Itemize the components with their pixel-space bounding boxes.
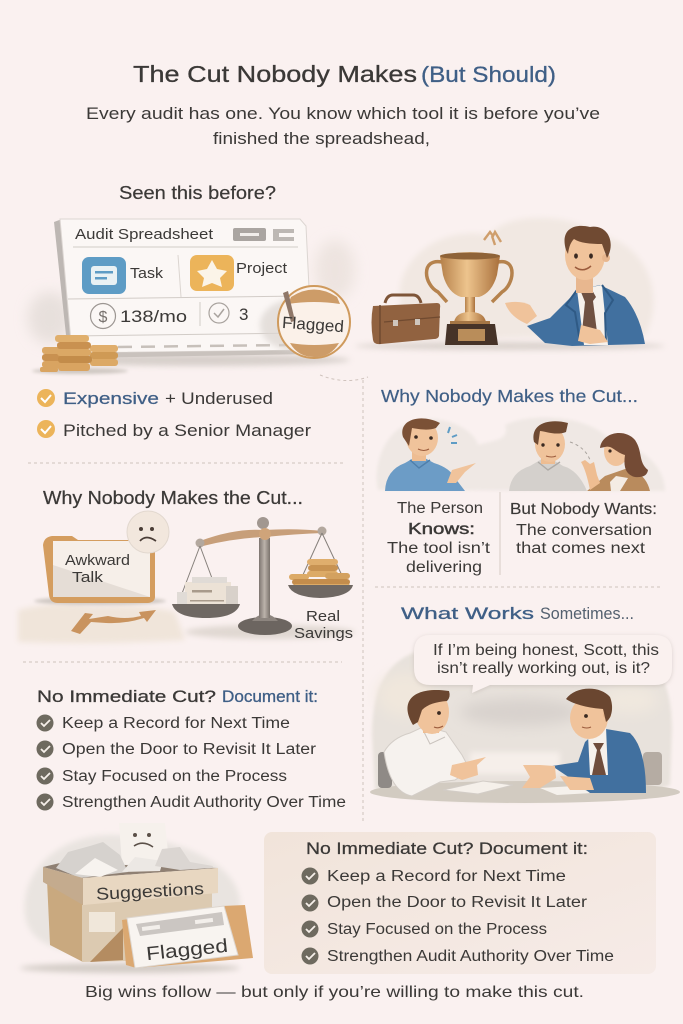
illustration: two conversations <box>377 417 665 491</box>
item 1: Keep a Record for Next Time <box>62 715 290 732</box>
text: the person knows: delivering <box>406 559 482 576</box>
text: but nobody wants: But Nobody Wants: <box>510 501 657 518</box>
heading: Document it: <box>222 688 318 706</box>
label: count: 3 <box>239 305 248 324</box>
heading: No Immediate Cut? <box>37 688 216 706</box>
item: expensive <box>37 389 273 408</box>
label: real savings: Savings <box>294 625 353 642</box>
panel: no immediate cut (box) <box>264 832 656 974</box>
speech bubble: If I’m being honest, Scott, this <box>433 642 659 659</box>
heading: No Immediate Cut? Document it: <box>306 840 588 858</box>
heading: what works sometimes: What Works <box>401 604 534 623</box>
illustration: awkward talk folder <box>18 511 185 643</box>
title: (But Should) <box>421 62 556 87</box>
label: real savings <box>294 608 353 642</box>
label: cost: 138/mo <box>120 307 187 326</box>
subtitle: finished the spreadshead, <box>213 129 430 148</box>
speech bubble <box>414 635 672 693</box>
item 3: Stay Focused on the Process <box>327 921 547 938</box>
icon: dollar: $ <box>99 309 108 326</box>
item: expensive: + Underused <box>165 389 273 408</box>
text: the person knows: Knows: <box>408 521 475 538</box>
crumpled papers <box>56 842 213 878</box>
text: but nobody wants <box>510 501 657 557</box>
person: left man <box>384 690 486 796</box>
curved dashed arrow <box>320 375 368 381</box>
heading: why nobody right: Why Nobody Makes the Cut... <box>381 386 638 406</box>
checklist: expensive and pitched <box>37 389 311 440</box>
heading: what works sometimes <box>401 604 634 623</box>
label: task: Task <box>130 265 164 282</box>
heading: what works sometimes: Sometimes... <box>540 604 634 623</box>
badge: flagged <box>260 286 350 358</box>
checklist: no immediate cut (left) <box>36 688 346 811</box>
flagged folder <box>122 905 253 968</box>
illustration: balance scale <box>172 517 355 642</box>
arrow <box>71 610 156 634</box>
person: right man <box>522 689 646 793</box>
trophy <box>426 232 512 345</box>
badge: flagged: Flagged <box>281 314 345 336</box>
briefcase <box>372 295 440 344</box>
icon: task <box>82 257 126 294</box>
label: awkward talk: Awkward <box>65 553 130 569</box>
item: pitched: Pitched by a Senior Manager <box>63 421 311 440</box>
illustration: audit spreadsheet card <box>28 219 355 366</box>
label: awkward talk: Talk <box>72 570 104 586</box>
icon: project star <box>190 255 234 291</box>
person: woman <box>581 433 650 491</box>
subtitle <box>86 104 600 148</box>
illustration: meeting scene <box>370 648 680 803</box>
item 2: Open the Door to Revisit It Later <box>62 741 316 758</box>
presenter <box>505 226 645 346</box>
item 4: Strengthen Audit Authority Over Time <box>62 794 346 811</box>
sad note <box>119 823 169 865</box>
papers <box>443 781 513 794</box>
label: suggestions: Suggestions <box>96 879 204 904</box>
heading <box>37 688 318 706</box>
card title: Audit Spreadsheet <box>75 226 214 243</box>
text: but nobody wants: The conversation <box>516 522 652 539</box>
illustration: coin stacks <box>32 335 128 374</box>
left pan papers <box>177 577 238 608</box>
illustration: suggestions box <box>20 823 253 973</box>
item 4: Strengthen Audit Authority Over Time <box>327 948 614 965</box>
footer: Big wins follow — but only if you’re willing to make this cut. <box>85 984 584 1001</box>
label: flagged: Flagged <box>145 936 229 965</box>
title: The Cut Nobody Makes <box>133 61 417 87</box>
window buttons <box>233 228 295 241</box>
illustration: trophy, briefcase and presenter <box>355 218 665 350</box>
person: man in blue shirt <box>385 418 476 491</box>
text: the person knows: The Person <box>397 500 483 517</box>
item 3: Stay Focused on the Process <box>62 768 287 785</box>
text: but nobody wants: that comes next <box>516 540 646 557</box>
person: man in grey shirt <box>509 421 587 491</box>
label: real savings: Real <box>306 608 340 625</box>
item: expensive: Expensive <box>63 389 159 408</box>
speech bubble: isn’t really working out, is it? <box>437 660 650 677</box>
crate <box>43 867 218 962</box>
heading: seen this before: Seen this before? <box>119 183 276 203</box>
item 1: Keep a Record for Next Time <box>327 868 566 885</box>
label: project: Project <box>236 260 288 277</box>
crate lid interior <box>43 863 218 878</box>
item 2: Open the Door to Revisit It Later <box>327 894 587 911</box>
heading: why nobody left: Why Nobody Makes the Cut... <box>43 488 303 508</box>
text: the person knows <box>387 500 491 576</box>
subtitle: Every audit has one. You know which tool it is before you’ve <box>86 104 600 123</box>
right pan coins <box>289 559 350 589</box>
icon: check <box>209 303 229 323</box>
icon: sad face <box>127 511 169 553</box>
text: the person knows: The tool isn’t <box>387 540 491 557</box>
vertical divider <box>362 380 364 822</box>
icon: dollar <box>90 304 116 328</box>
label: awkward talk <box>65 553 130 586</box>
title <box>133 61 556 87</box>
